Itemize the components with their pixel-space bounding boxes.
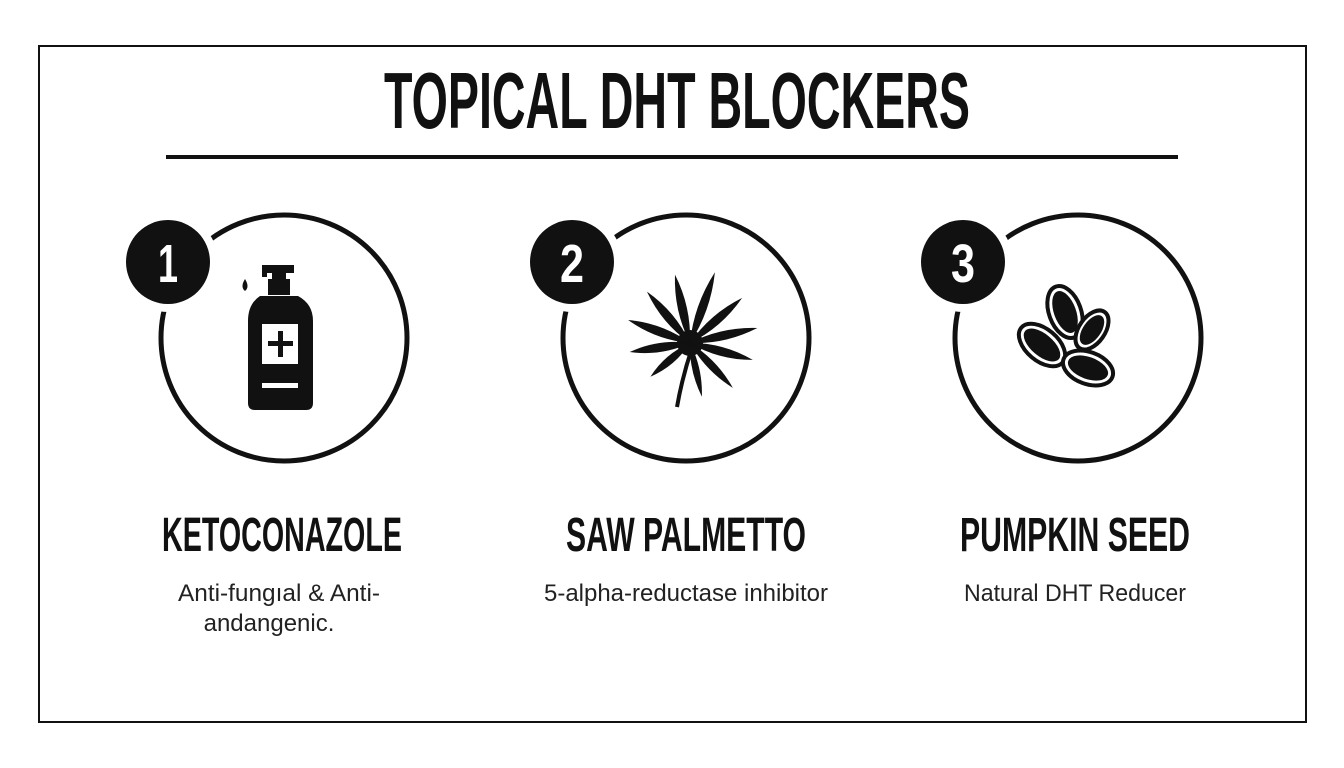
label: PUMPKIN SEED: PUMPKIN SEED <box>960 509 1190 562</box>
label: SAW PALMETTO: SAW PALMETTO <box>566 509 806 562</box>
label: KETOCONAZOLE: KETOCONAZOLE <box>162 509 402 562</box>
panel: ketoconazole <box>118 212 407 637</box>
circle 2 <box>563 215 809 461</box>
description 1: Anti-fungıal & Anti- <box>178 580 380 607</box>
icon: palm leaf <box>627 271 758 407</box>
icon: pumpkin seeds <box>1011 281 1118 392</box>
description 2: 5-alpha-reductase inhibitor <box>544 580 828 607</box>
icon: pump bottle <box>242 265 313 410</box>
circle 1 <box>161 215 407 461</box>
description 1: andangenic. <box>204 610 334 637</box>
description 3: Natural DHT Reducer <box>964 580 1186 607</box>
title underline <box>166 155 1178 159</box>
panel: saw palmetto <box>522 212 828 607</box>
badge 1 <box>118 212 218 312</box>
circle 3 <box>955 215 1201 461</box>
panel: pumpkin seed <box>913 212 1201 607</box>
badge 1: 1 <box>158 234 178 294</box>
badge 3 <box>913 212 1013 312</box>
badge 3: 3 <box>951 234 975 294</box>
badge 2: 2 <box>560 234 584 294</box>
badge 2 <box>522 212 622 312</box>
